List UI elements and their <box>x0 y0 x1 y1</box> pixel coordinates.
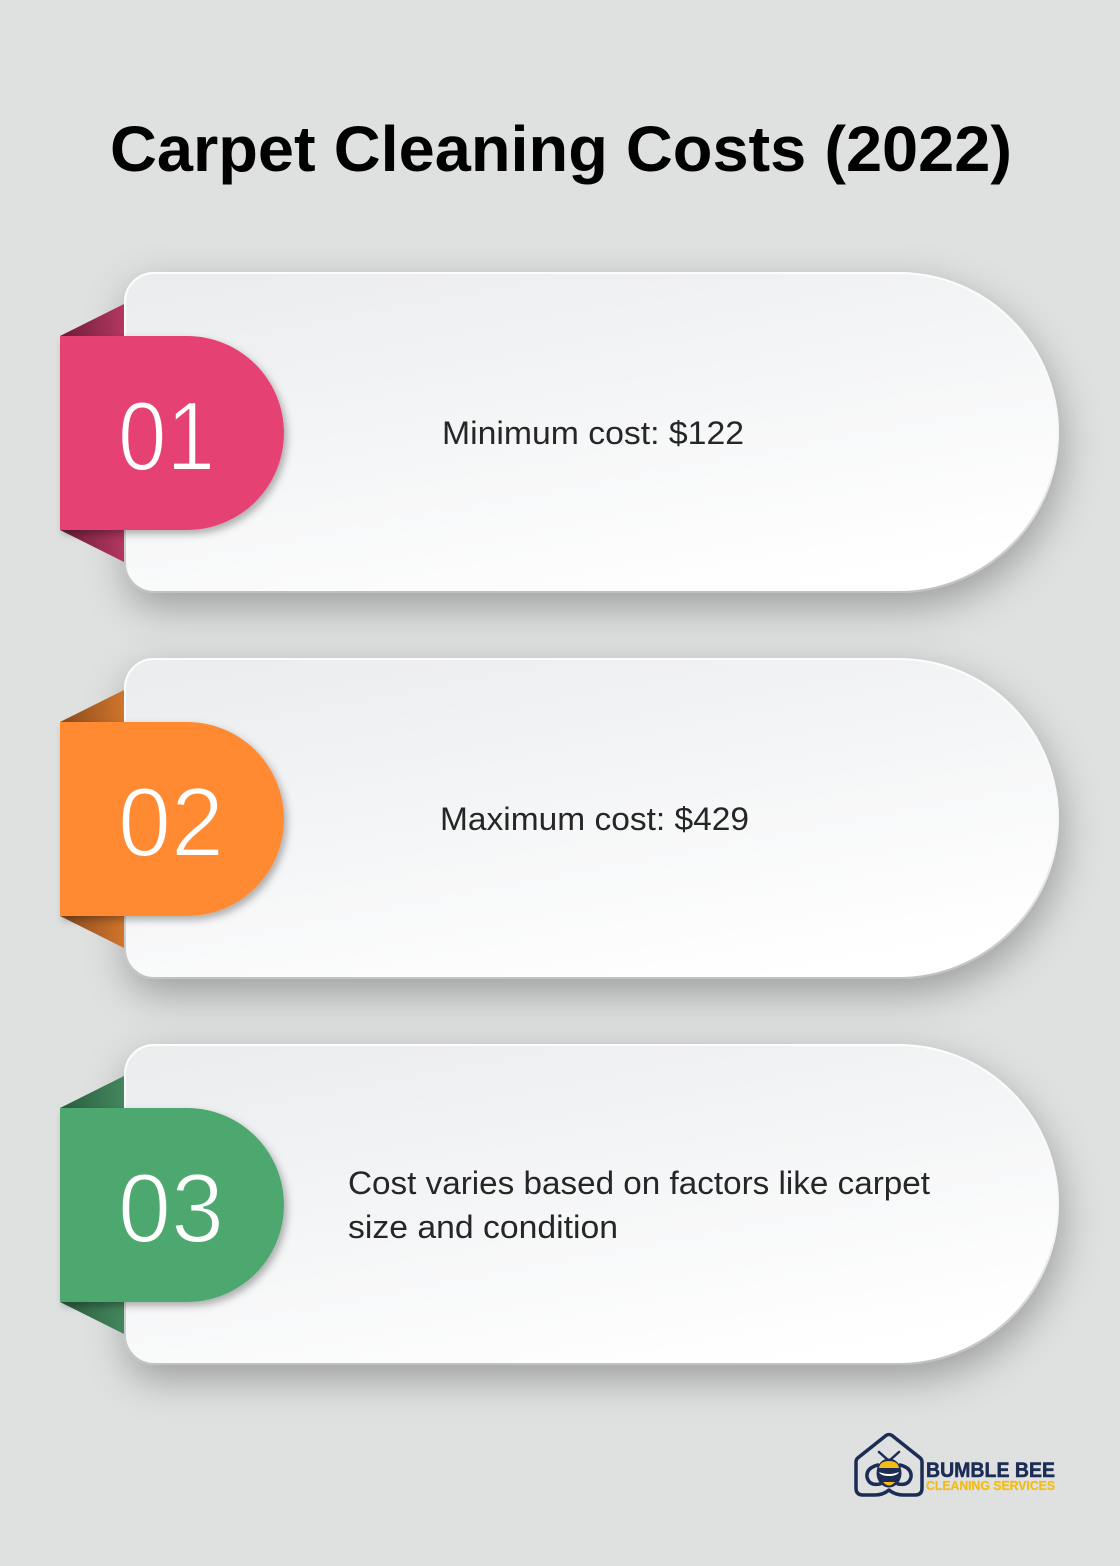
card 2 <box>125 659 1058 978</box>
text: cost factors: Cost varies based on factors like carpet <box>348 1165 930 1201</box>
panel: minimum cost <box>60 273 1058 592</box>
text: maximum cost: Maximum cost: $429 <box>440 801 749 837</box>
logo wordmark: BUMBLE BEE <box>926 1459 1055 1482</box>
number 01: 01 <box>118 381 215 491</box>
lower fold 3 <box>60 1302 124 1334</box>
panel: maximum cost <box>60 659 1058 978</box>
text: cost factors <box>348 1165 930 1245</box>
number 03: 03 <box>118 1153 224 1263</box>
number 02: 02 <box>118 767 224 877</box>
icon: house with bee <box>856 1434 922 1495</box>
badge 01 <box>60 336 284 530</box>
upper fold 2 <box>60 690 124 722</box>
text: minimum cost: Minimum cost: $122 <box>442 415 744 451</box>
badge 03 <box>60 1108 284 1302</box>
logo tagline: CLEANING SERVICES <box>926 1479 1055 1493</box>
lower fold 2 <box>60 916 124 948</box>
title: Carpet Cleaning Costs (2022) <box>110 113 1012 185</box>
lower fold 1 <box>60 530 124 562</box>
card 3 <box>125 1045 1058 1364</box>
logo: Bumble Bee Cleaning Services <box>856 1434 1055 1495</box>
card 1 <box>125 273 1058 592</box>
text: cost factors: size and condition <box>348 1209 618 1245</box>
badge 02 <box>60 722 284 916</box>
upper fold 1 <box>60 304 124 336</box>
panel: cost factors <box>60 1045 1058 1364</box>
upper fold 3 <box>60 1076 124 1108</box>
